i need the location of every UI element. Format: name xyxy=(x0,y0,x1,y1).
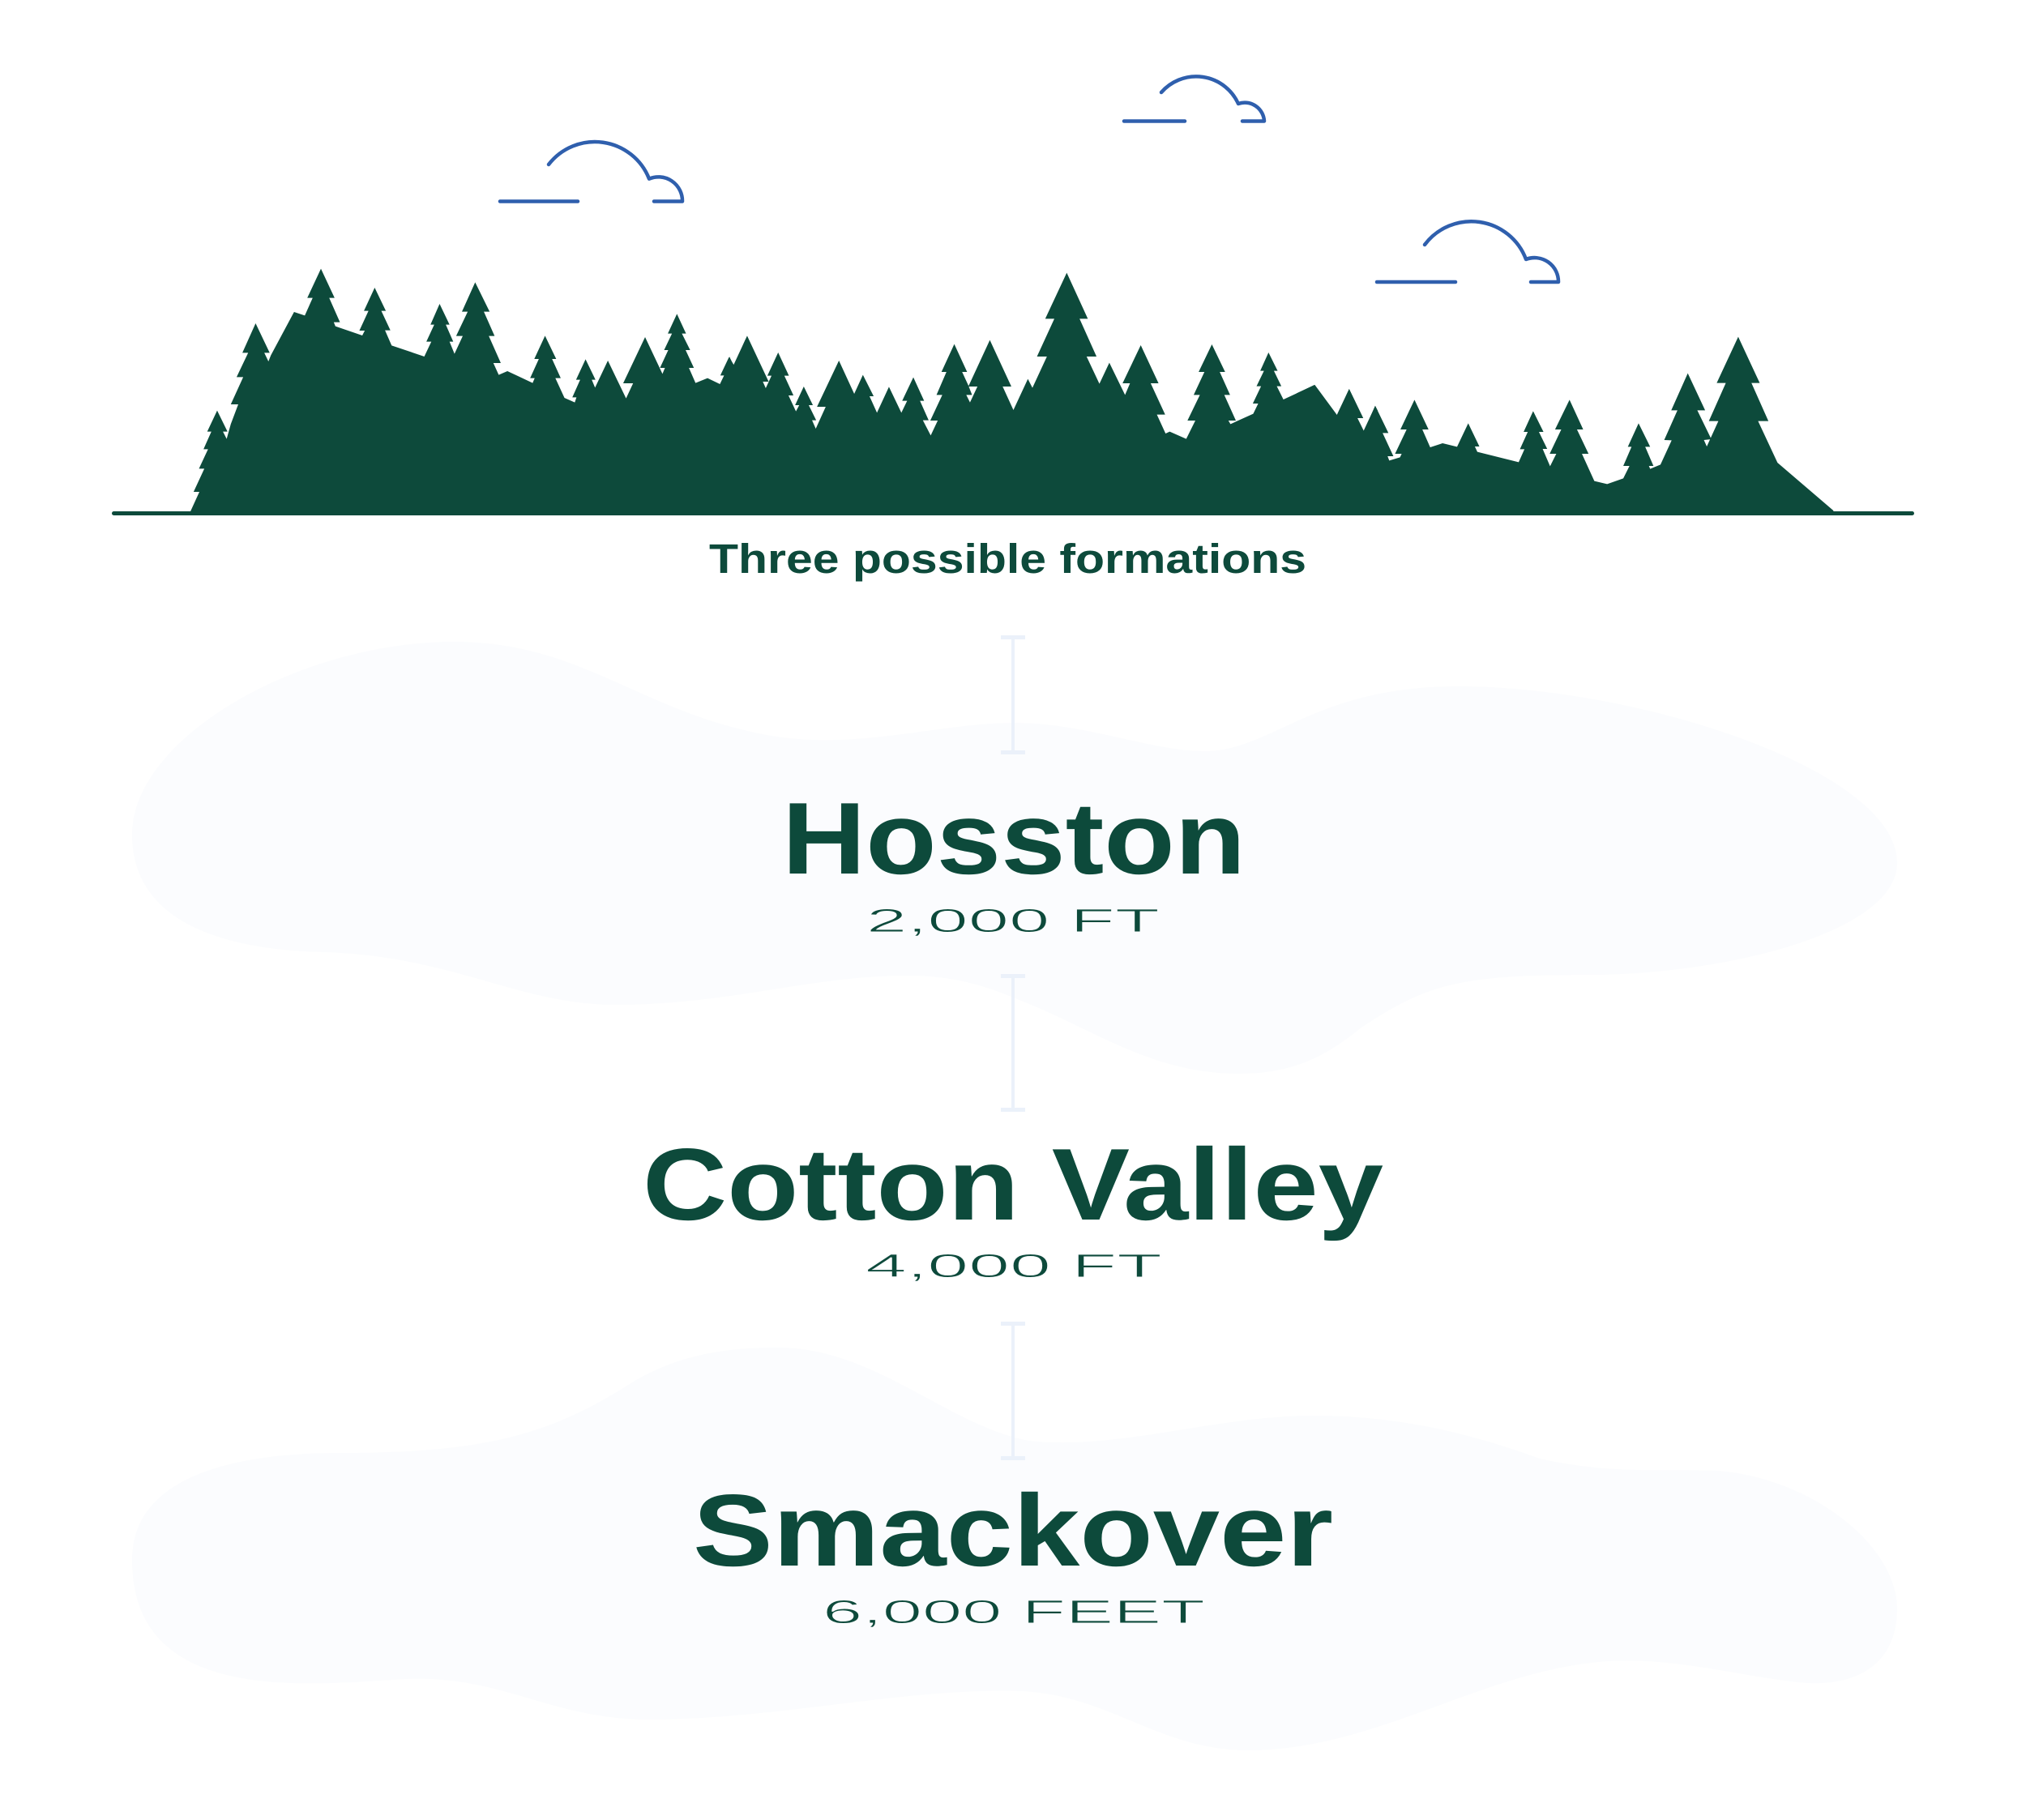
formation: Smackover, 6,000 feet xyxy=(693,1473,1333,1630)
formation: Cotton Valley, 4,000 ft: 4,000 FT xyxy=(866,1247,1162,1284)
background blob: upper xyxy=(132,642,1897,1074)
forest silhouette with ground line xyxy=(112,269,1914,515)
cloud: top centre xyxy=(1124,76,1264,122)
formation: Smackover, 6,000 feet: 6,000 FEET xyxy=(823,1593,1205,1630)
formation: Hosston, 2,000 ft: 2,000 FT xyxy=(866,902,1160,939)
formation: Hosston, 2,000 ft xyxy=(782,781,1246,939)
formation: Smackover, 6,000 feet: Smackover xyxy=(693,1473,1333,1587)
cloud: left xyxy=(500,142,682,201)
formation: Cotton Valley, 4,000 ft: Cotton Valley xyxy=(643,1127,1383,1241)
connector: Hosston to Cotton Valley xyxy=(1001,974,1025,1112)
connector: top to Hosston xyxy=(1001,635,1025,754)
formation: Cotton Valley, 4,000 ft xyxy=(643,1127,1383,1284)
heading: Three possible formations: Three possible formations xyxy=(709,536,1306,582)
formation: Hosston, 2,000 ft: Hosston xyxy=(782,781,1246,895)
background blob: lower xyxy=(132,1348,1897,1750)
cloud: right xyxy=(1377,221,1558,282)
connector: Cotton Valley to Smackover xyxy=(1001,1322,1025,1460)
